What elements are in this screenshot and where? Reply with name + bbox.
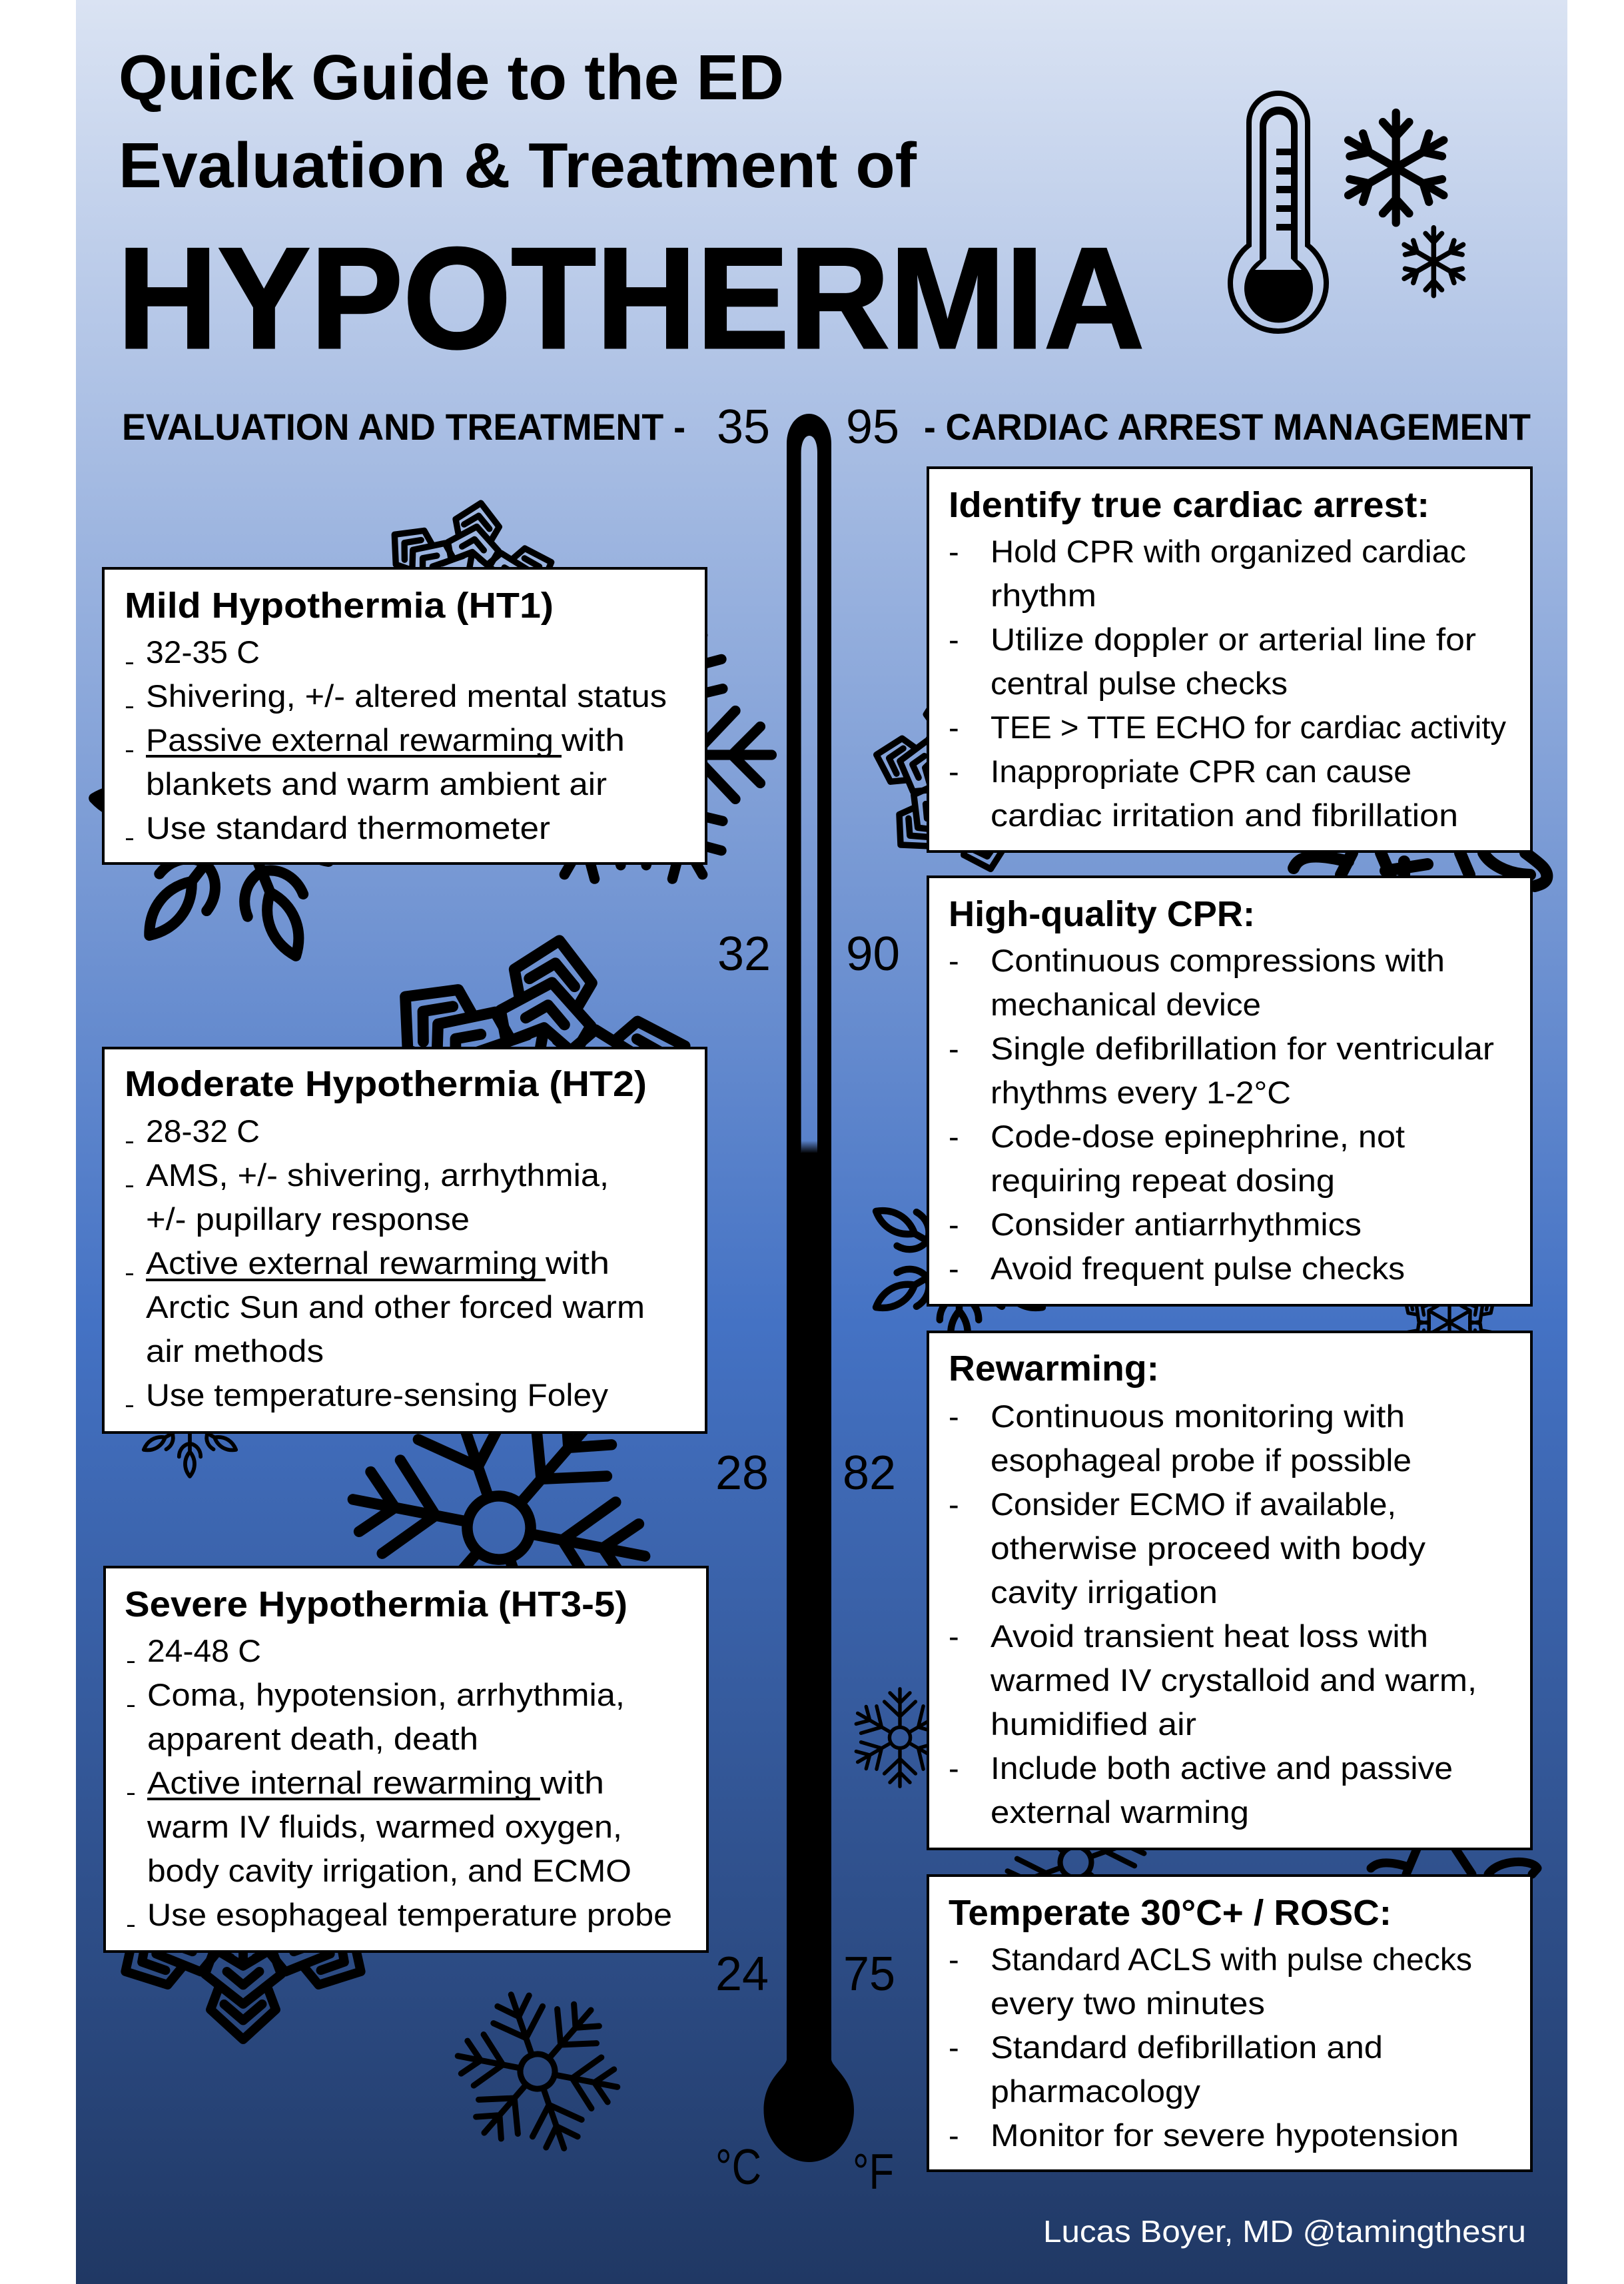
heading: moderate: Moderate Hypothermia (HT2) — [125, 1064, 647, 1104]
text: rewarming list: - — [949, 1618, 959, 1654]
heading: mild: Mild Hypothermia (HT1) — [125, 586, 554, 626]
background snowflake: small diamond between right boxes — [1397, 1271, 1502, 1375]
temperature scale: Celsius: °C — [715, 2139, 761, 2195]
background snowflake: leaf fragments between last two right boxes — [1371, 1849, 1537, 1874]
text: moderate list: - — [125, 1259, 135, 1286]
text: moderate list: Use temperature-sensing Foley — [146, 1377, 609, 1413]
text: identify list — [949, 534, 1506, 833]
text: severe list: - — [126, 1690, 136, 1718]
text: CPR list: Code-dose epinephrine, not — [991, 1119, 1405, 1154]
background snowflake: small leaf, below moderate box — [139, 1370, 241, 1476]
text: severe list: Active internal rewarming — [147, 1765, 532, 1800]
text: CPR list: mechanical device — [991, 987, 1261, 1022]
text: identify list: rhythm — [991, 578, 1096, 613]
text: severe list: warm IV fluids, warmed oxygen, — [147, 1809, 622, 1844]
text: moderate list: +/- pupillary response — [146, 1201, 470, 1237]
icon: large snowflake — [1342, 113, 1450, 223]
text: moderate list — [125, 1113, 645, 1418]
text: identify list: - — [949, 534, 959, 569]
text: severe list: 24-48 C — [147, 1633, 261, 1668]
background snowflake: branched, bottom left — [432, 1968, 643, 2175]
heading: rewarming: Rewarming: — [949, 1349, 1159, 1389]
text: CPR list: requiring repeat dosing — [991, 1163, 1335, 1198]
temperature scale: Celsius: 24 — [715, 1948, 769, 2001]
text: moderate list: Active external rewarming — [146, 1245, 538, 1281]
temperature scale: Fahrenheit: 82 — [843, 1446, 896, 1500]
text: rewarming list — [949, 1399, 1477, 1830]
title: Evaluation & Treatment of — [119, 130, 917, 201]
text: identify list: - — [949, 622, 959, 657]
panel: high-quality CPR — [928, 877, 1531, 1305]
text: CPR list: Continuous compressions with — [991, 943, 1445, 978]
background snowflake: branched, between rewarming and temperate boxes — [989, 1777, 1162, 1948]
text: mild list: - — [125, 648, 135, 675]
background snowflake: leaf, left of CPR box — [866, 1163, 1052, 1355]
temperature scale: Celsius: 28 — [715, 1446, 769, 1500]
text: rewarming list: external warming — [991, 1794, 1249, 1830]
text: mild list: Passive external rewarming — [146, 722, 554, 758]
panel: severe hypothermia — [105, 1567, 707, 1952]
text: severe list: with — [540, 1765, 604, 1800]
text: CPR list: rhythms every 1-2°C — [991, 1075, 1291, 1110]
text: rewarming list: humidified air — [991, 1706, 1196, 1742]
central thermometer — [763, 414, 854, 2162]
background snowflake: large branched, below moderate box — [306, 1337, 691, 1718]
heading: identify: Identify true cardiac arrest: — [949, 485, 1429, 525]
temperature scale: Fahrenheit: 90 — [846, 927, 900, 981]
credit: Lucas Boyer, MD @tamingthesru — [1043, 2214, 1526, 2249]
text: moderate list: 28-32 C — [146, 1113, 260, 1149]
text: rewarming list: esophageal probe if possible — [991, 1442, 1412, 1478]
text: CPR list: - — [949, 1031, 959, 1066]
background snowflake: leaf fragments between first two right boxes — [1294, 853, 1547, 886]
temperature scale: Celsius: 35 — [717, 400, 770, 454]
text: CPR list — [949, 943, 1494, 1286]
text: temperate list: pharmacology — [991, 2073, 1201, 2109]
text: rewarming list: - — [949, 1750, 959, 1786]
panel: mild hypothermia — [103, 568, 706, 863]
text: mild list: Shivering, +/- altered mental status — [146, 678, 667, 714]
text: temperate list: Standard defibrillation and — [991, 2029, 1383, 2065]
text: temperate list — [949, 1942, 1472, 2153]
text: CPR list: Avoid frequent pulse checks — [991, 1251, 1405, 1286]
heading: severe: Severe Hypothermia (HT3-5) — [125, 1584, 627, 1624]
text: temperate list: Monitor for severe hypotension — [991, 2117, 1459, 2153]
background snowflake: diamond, behind mild box — [357, 487, 573, 700]
text: rewarming list: - — [949, 1399, 959, 1434]
text: rewarming list: Avoid transient heat loss with — [991, 1618, 1428, 1654]
text: CPR list: - — [949, 1119, 959, 1154]
text: rewarming list: - — [949, 1486, 959, 1522]
text: moderate list: - — [125, 1171, 135, 1198]
text: moderate list: air methods — [146, 1333, 324, 1369]
text: temperate list: Standard ACLS with pulse checks — [991, 1942, 1472, 1977]
title: Quick Guide to the ED — [119, 42, 784, 113]
text: severe list: - — [126, 1910, 136, 1938]
text: mild list — [125, 634, 667, 851]
text: temperate list: - — [949, 1942, 959, 1977]
text: mild list: 32-35 C — [146, 634, 260, 670]
temperature scale: Celsius: 32 — [717, 927, 771, 981]
text: mild list: - — [125, 736, 135, 763]
text: identify list: Utilize doppler or arterial line for — [991, 622, 1476, 657]
text: mild list: Use standard thermometer — [146, 810, 550, 846]
panel: rewarming — [928, 1332, 1531, 1849]
text: temperate list: every two minutes — [991, 1986, 1265, 2021]
background snowflake: leaf, below mild box — [53, 628, 428, 1009]
panel: temperate ROSC — [928, 1876, 1531, 2171]
text: rewarming list: Continuous monitoring with — [991, 1399, 1405, 1434]
text: identify list: Hold CPR with organized cardiac — [991, 534, 1466, 569]
temperature scale: Celsius — [715, 400, 771, 2195]
text: severe list: - — [126, 1646, 136, 1674]
background snowflake: small branched, left of rewarming box — [850, 1689, 950, 1786]
text: identify list: TEE > TTE ECHO for cardiac activity — [991, 710, 1506, 745]
title: HYPOTHERMIA — [117, 217, 1144, 378]
text: CPR list: - — [949, 1251, 959, 1286]
heading: CPR: High-quality CPR: — [949, 894, 1255, 934]
text: temperate list: - — [949, 2029, 959, 2065]
background snowflake: diamond, above moderate box — [338, 911, 723, 1293]
text: CPR list: Single defibrillation for ventricular — [991, 1031, 1494, 1066]
text: severe list: - — [126, 1778, 136, 1806]
title — [117, 42, 1144, 378]
text: severe list: body cavity irrigation, and ECMO — [147, 1853, 631, 1888]
text: temperate list: - — [949, 2117, 959, 2153]
icon: small snowflake — [1400, 228, 1467, 296]
text: mild list: - — [125, 824, 135, 851]
heading: evaluation and treatment: EVALUATION AND TREATMENT - — [122, 406, 685, 448]
text: moderate list: - — [125, 1391, 135, 1418]
background snowflake: diamond, left of first right box — [851, 664, 1082, 893]
temperature scale: Fahrenheit: °F — [853, 2143, 894, 2199]
text: identify list: - — [949, 754, 959, 789]
icon: thermometer — [1230, 93, 1326, 331]
temperature scale: Fahrenheit: 75 — [843, 1948, 895, 2001]
heading: cardiac arrest management: - CARDIAC ARREST MANAGEMENT — [924, 406, 1531, 448]
text: moderate list: Arctic Sun and other forced warm — [146, 1289, 645, 1325]
text: CPR list: - — [949, 1207, 959, 1242]
background snowflake: branched, right of mild box — [442, 564, 825, 945]
background snowflake: diamond, below severe box — [105, 1768, 381, 2039]
text: identify list: Inappropriate CPR can cause — [991, 754, 1412, 789]
text: severe list: Coma, hypotension, arrhythmia, — [147, 1677, 625, 1712]
heading: temperate: Temperate 30°C+ / ROSC: — [949, 1893, 1392, 1933]
text: rewarming list: warmed IV crystalloid and warm, — [990, 1662, 1477, 1698]
panel: moderate hypothermia — [103, 1048, 706, 1432]
text: mild list: with — [561, 722, 625, 758]
temperature scale: Fahrenheit — [843, 400, 900, 2199]
text: rewarming list: Include both active and passive — [991, 1750, 1453, 1786]
text: CPR list: Consider antiarrhythmics — [991, 1207, 1362, 1242]
text: mild list: blankets and warm ambient air — [146, 766, 607, 802]
text: CPR list: - — [949, 943, 959, 978]
temperature scale: Fahrenheit: 95 — [846, 400, 899, 454]
text: identify list: - — [949, 710, 959, 745]
text: moderate list: with — [545, 1245, 609, 1281]
text: rewarming list: Consider ECMO if available, — [991, 1486, 1396, 1522]
text: rewarming list: otherwise proceed with body — [991, 1530, 1426, 1566]
panel: identify true cardiac arrest — [928, 468, 1531, 852]
text: identify list: central pulse checks — [991, 666, 1288, 701]
text: mild list: - — [125, 692, 135, 719]
text: moderate list: - — [125, 1127, 135, 1154]
text: moderate list: AMS, +/- shivering, arrhythmia, — [146, 1157, 609, 1193]
text: severe list: Use esophageal temperature probe — [147, 1897, 672, 1932]
text: severe list: apparent death, death — [147, 1721, 478, 1756]
text: rewarming list: cavity irrigation — [991, 1574, 1218, 1610]
text: identify list: cardiac irritation and fibrillation — [991, 798, 1458, 833]
text: severe list — [126, 1633, 672, 1938]
